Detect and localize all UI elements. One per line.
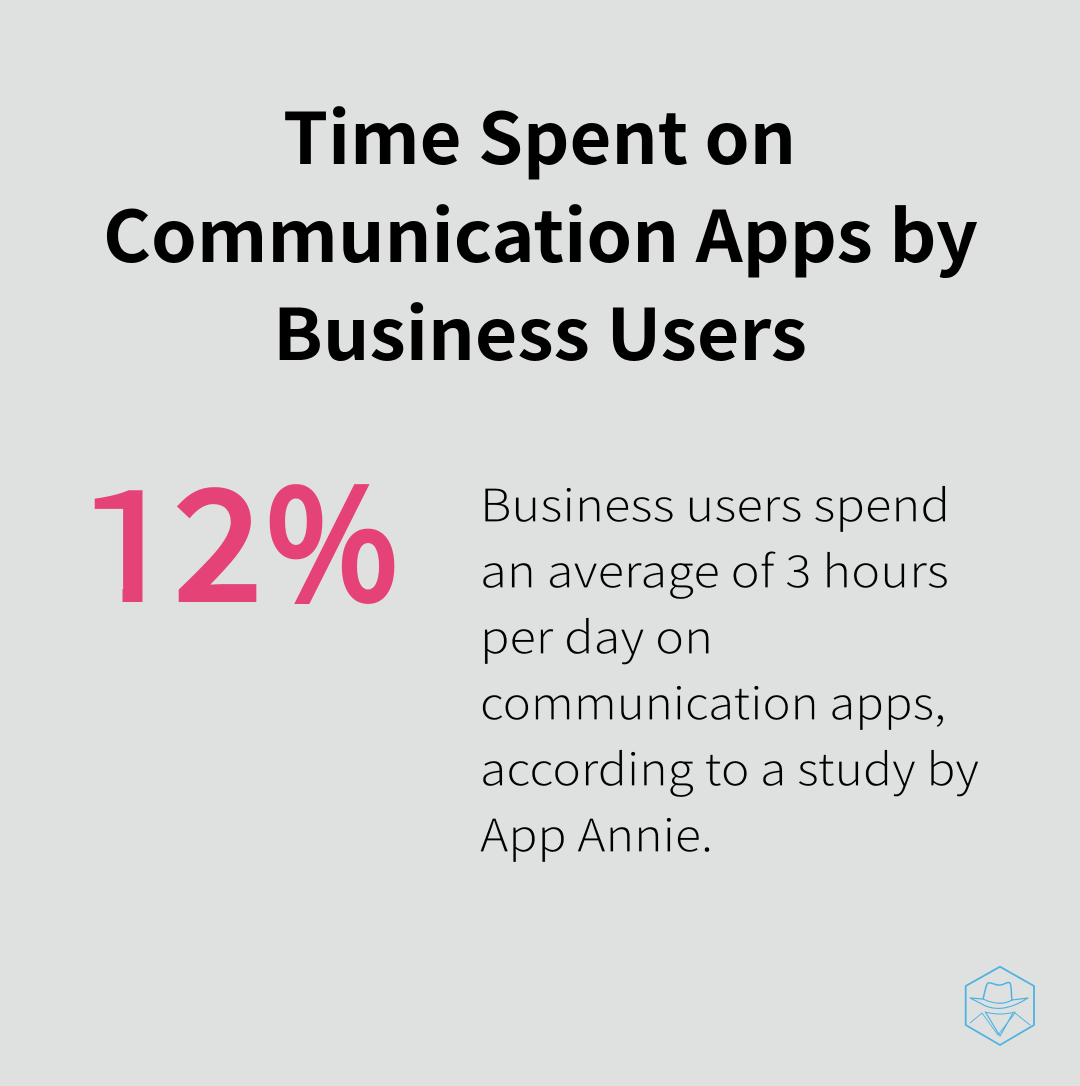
- title: [103, 83, 978, 381]
- big percentage: 2: [175, 426, 261, 643]
- title: Business Users: [273, 279, 807, 381]
- title: Communication Apps by: [103, 181, 978, 283]
- icon: hexagon spy logo: [966, 967, 1034, 1045]
- description text block: an average of 3 hours: [480, 536, 949, 600]
- description text block: communication apps,: [480, 668, 946, 732]
- description text block: Business users spend: [480, 470, 950, 534]
- description text block: according to a study by: [480, 734, 979, 798]
- title: Time Spent on: [283, 83, 796, 185]
- description text block: per day on: [480, 602, 713, 666]
- description text block: [480, 470, 979, 864]
- big percentage: [94, 484, 394, 604]
- big percentage: 1: [70, 422, 190, 647]
- big percentage: %: [267, 426, 397, 643]
- infographic canvas: [94, 106, 1035, 1046]
- description text block: App Annie.: [480, 800, 713, 864]
